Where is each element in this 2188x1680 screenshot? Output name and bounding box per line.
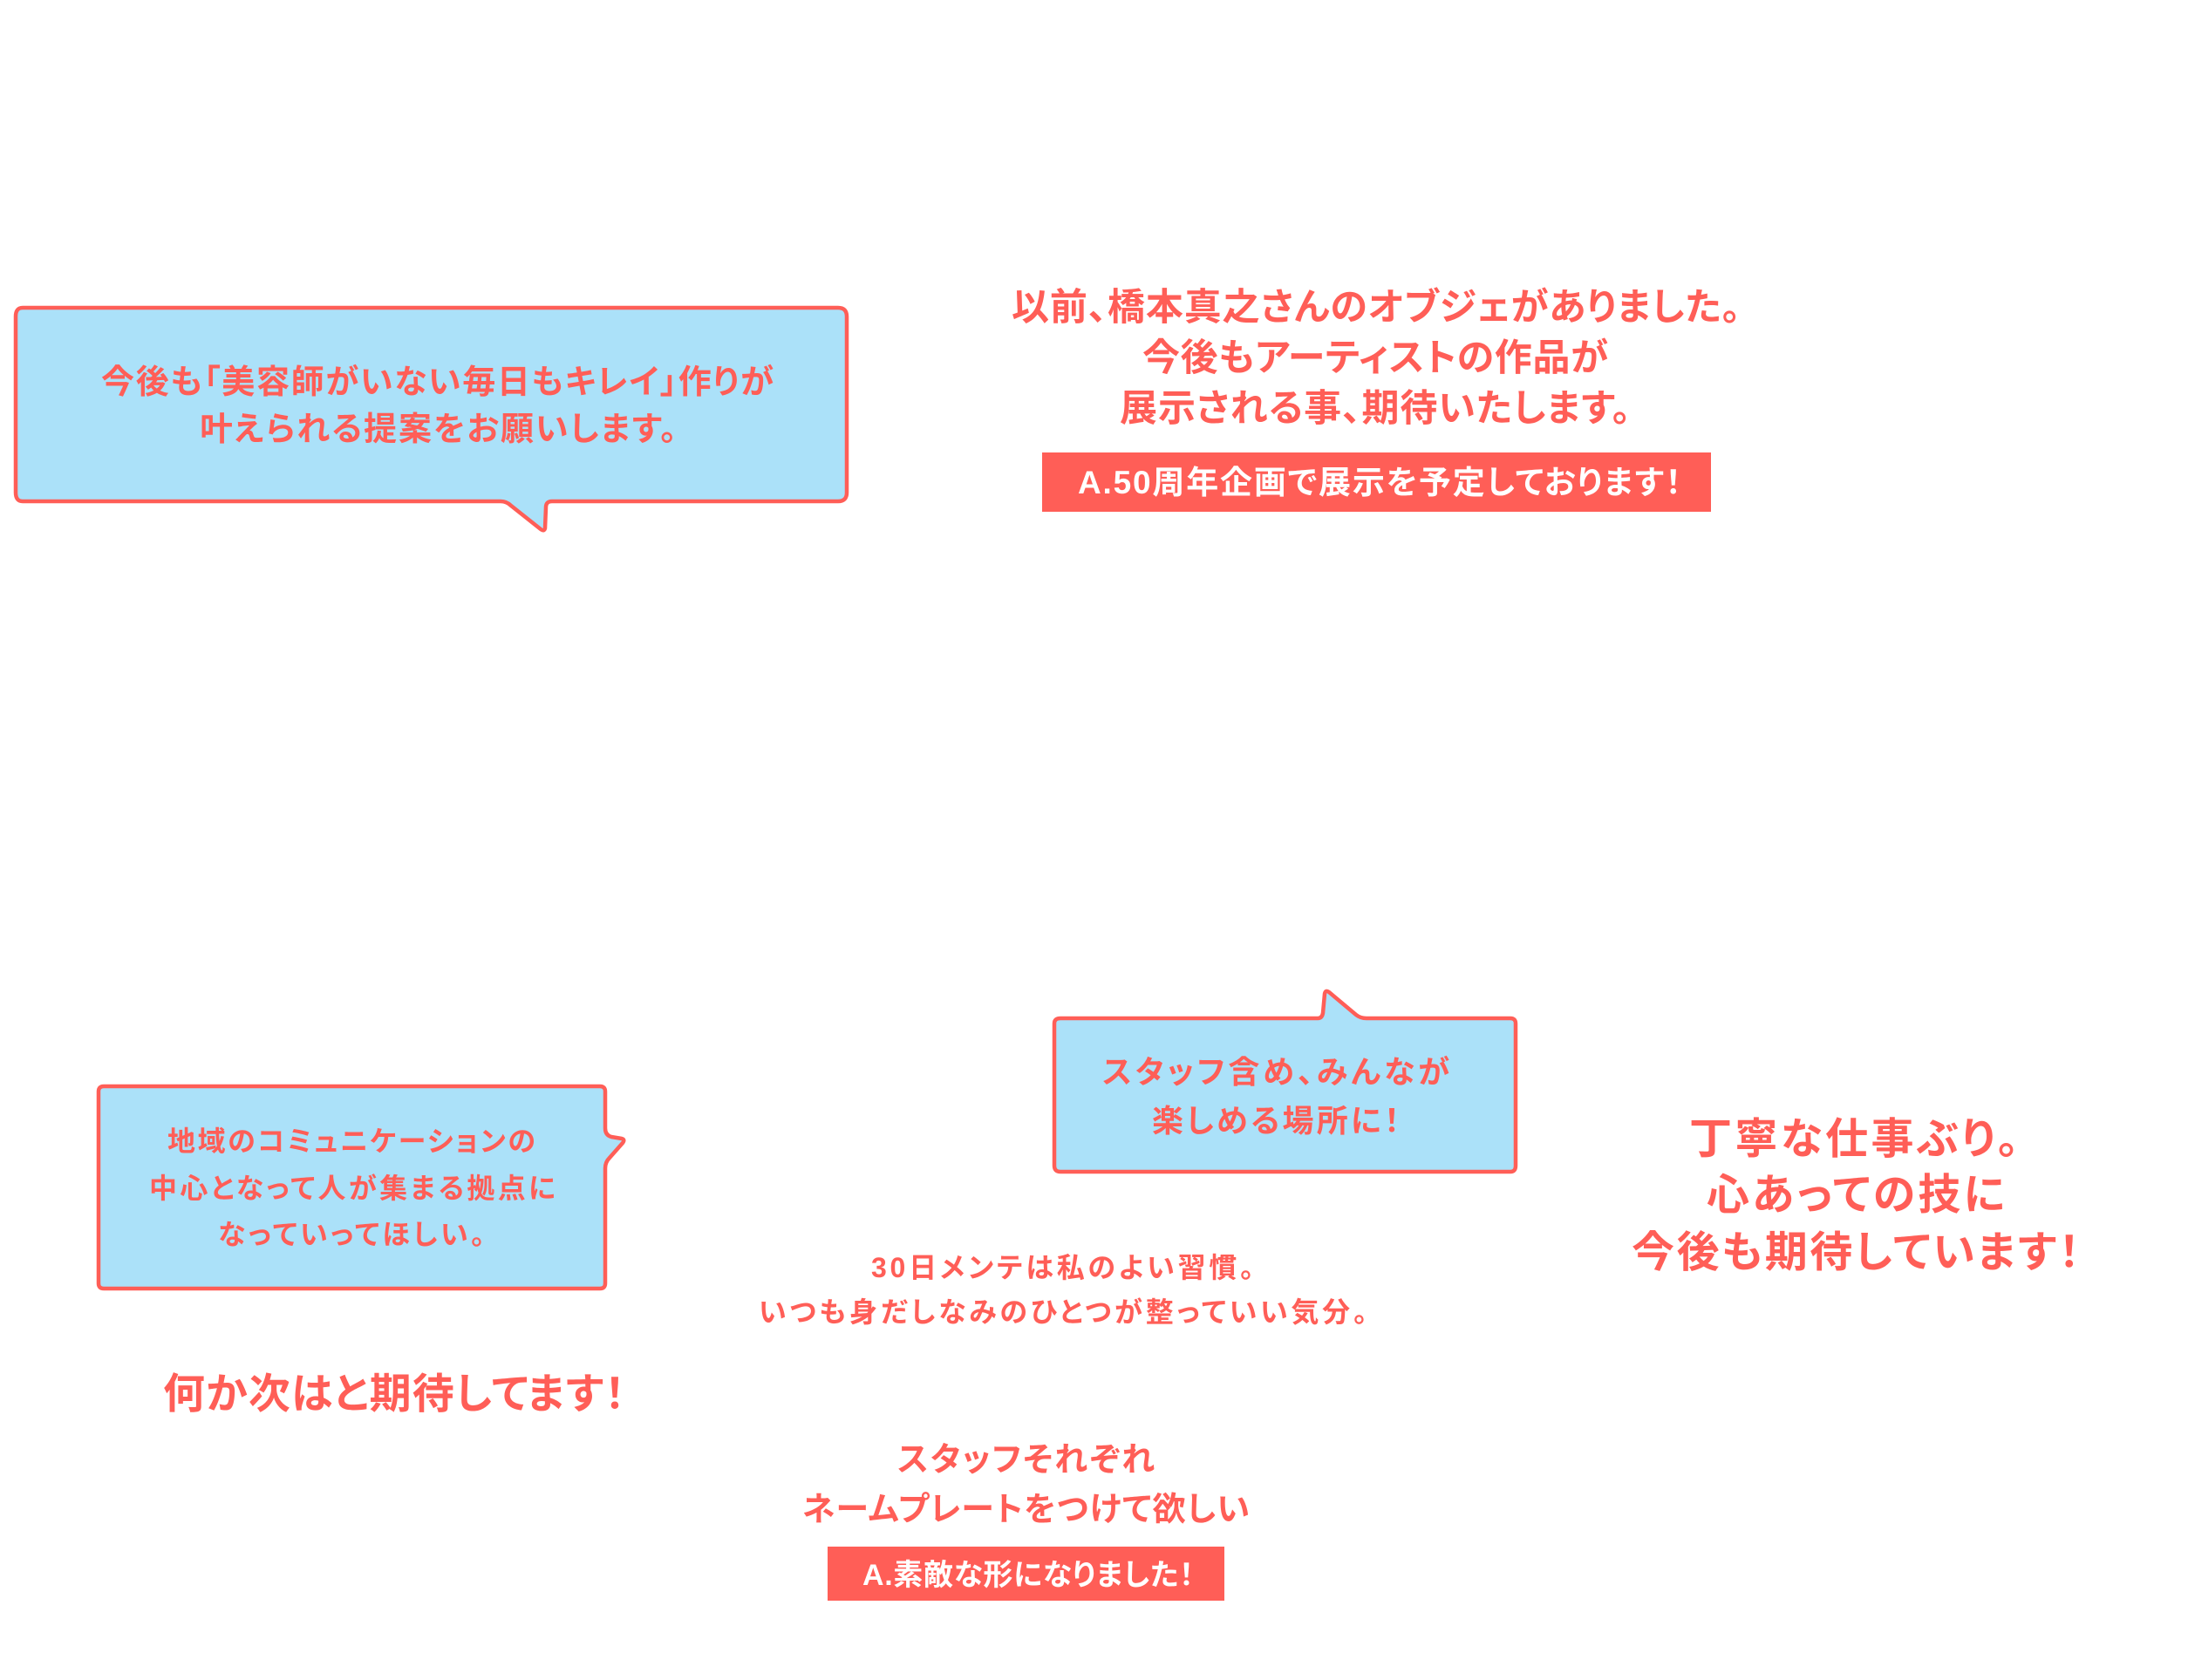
bubble shape with right tail	[99, 1086, 624, 1289]
bubble text	[1102, 1054, 1449, 1139]
request text	[802, 1442, 1250, 1528]
bubble text: 地域のコミュニケーションの	[167, 1126, 535, 1157]
bubble text: 楽しめる場所に！	[1152, 1103, 1400, 1139]
answer badge	[828, 1547, 1224, 1601]
request text: スタッフそれぞれ	[897, 1442, 1155, 1479]
text block: artwork request with answer	[1012, 287, 1741, 512]
text block: expecting something next: 何か次はと期待してます！	[163, 1371, 625, 1418]
text block: praise for careful work	[1632, 1116, 2080, 1276]
bubble shape with downward tail	[16, 308, 847, 530]
text block: name plate request with answer	[802, 1442, 1250, 1601]
text block: praise for careful work: 丁寧な仕事ぶり。	[1689, 1116, 2019, 1163]
bubble text: 叶えられる提案をお願いします。	[200, 411, 677, 448]
request text	[1012, 287, 1741, 430]
answer badge: A.素敵な形になりました！	[862, 1559, 1194, 1592]
text block: monthly maintenance comment	[759, 1252, 1367, 1328]
bubble text: 中心となって人が集まる拠点に	[149, 1173, 556, 1204]
request text: ネームプレートをつけて欲しい	[802, 1492, 1250, 1528]
bubble text: なっていってほしい。	[218, 1219, 485, 1250]
text block: praise for careful work: 今後も期待しています！	[1632, 1229, 2080, 1276]
text block: praise for careful work: 心あっての技に	[1707, 1172, 2005, 1219]
panel: speech bubble, fun place for everyone	[1054, 991, 1516, 1172]
bubble text: スタッフ含め、みんなが	[1102, 1054, 1449, 1090]
answer badge: A.50周年企画で展示を予定しております！	[1078, 465, 1681, 500]
request text: 展示される事、期待いたします。	[1120, 388, 1631, 430]
panel: speech bubble, beauty every day request	[16, 308, 847, 530]
bubble text	[149, 1126, 556, 1250]
bubble text	[101, 364, 774, 448]
request text: 今後もアーティストの作品が	[1142, 337, 1608, 379]
text block: monthly maintenance comment: いつも身だしなみのひとつが整っていい気分。	[759, 1296, 1367, 1328]
bubble text: 今後も「美容師がいない毎日もキレイ」作りが	[101, 364, 774, 401]
answer badge	[1042, 452, 1711, 512]
panel: speech bubble, community hub request	[99, 1086, 624, 1289]
text block: monthly maintenance comment: 30日メンテは私のよい習慣。	[871, 1252, 1254, 1283]
bubble shape with upward tail	[1054, 991, 1516, 1172]
request text: 以前、橋本真之さんのオブジェがありました。	[1012, 287, 1741, 329]
